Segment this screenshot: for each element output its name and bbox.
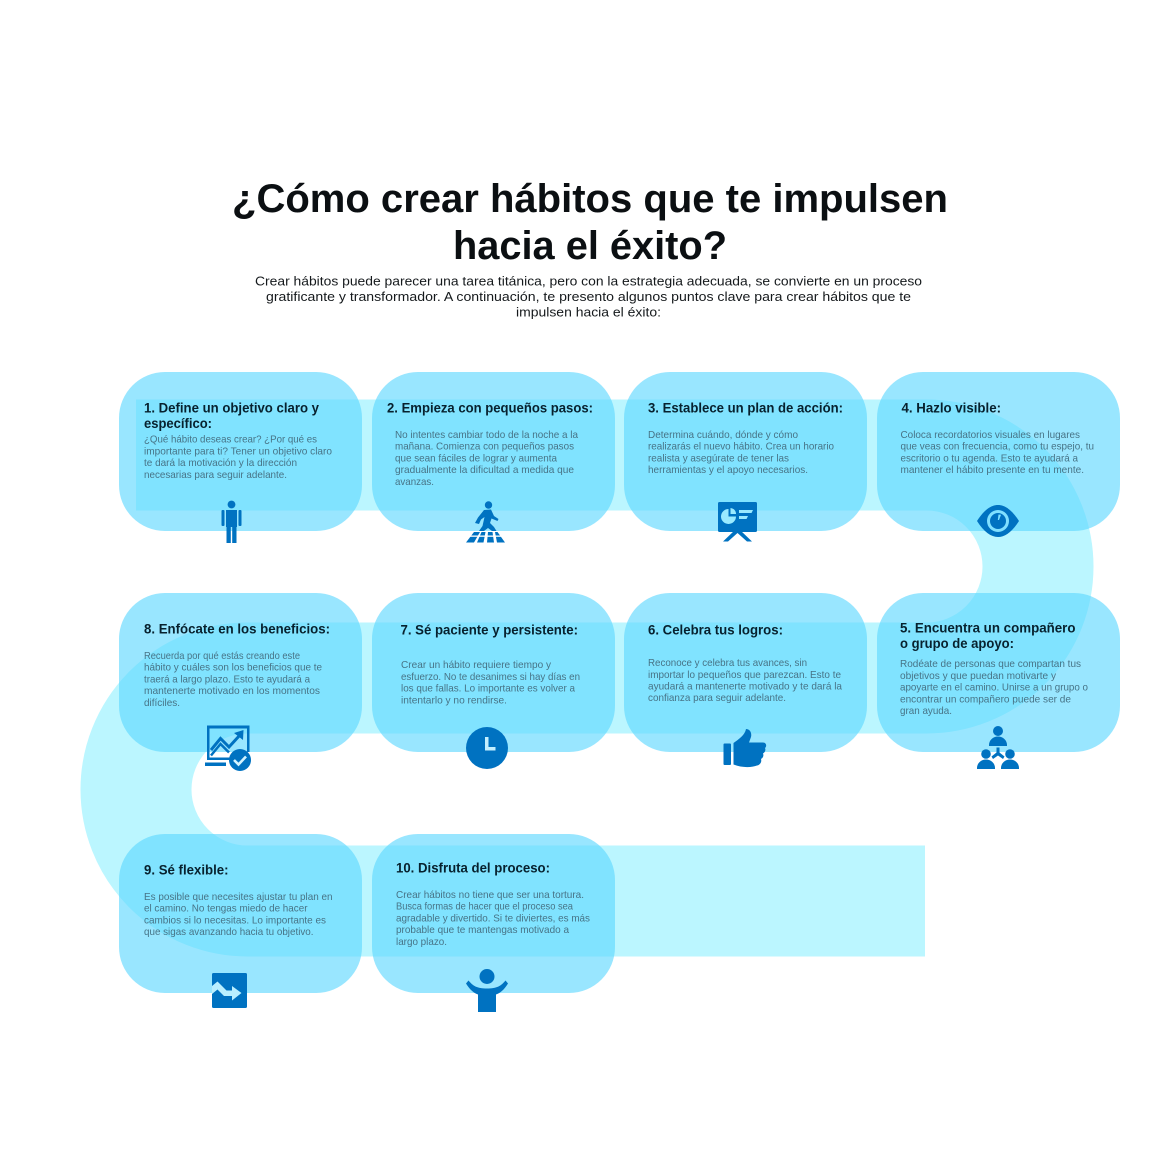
- text: step 6: Reconoce y celebra tus avances, sin: [648, 658, 807, 669]
- text: step 10: [396, 890, 590, 948]
- text: step 7: [401, 660, 580, 706]
- panel: step 7: [372, 593, 615, 769]
- text: step 7: los que fallas. Lo importante es volver a: [401, 684, 575, 694]
- panel: step 10: [372, 834, 615, 1012]
- winding ribbon path: [136, 455, 1038, 901]
- intro text: Crear hábitos puede parecer una tarea titánica, pero con la estrategia adecuada, se convierte en un proceso: [255, 274, 922, 288]
- panel: step 1: [119, 372, 362, 543]
- text: step 1: ¿Qué hábito deseas crear? ¿Por qué es: [144, 434, 317, 446]
- text: step 9: que sigas avanzando hacia tu objetivo.: [144, 927, 314, 938]
- text: step 10: largo plazo.: [396, 937, 447, 948]
- text: step 9: [144, 892, 332, 938]
- text: step 1: necesarias para seguir adelante.: [144, 470, 287, 481]
- text: step 8: mantenerte motivado en los momentos: [144, 686, 320, 697]
- icon: person with raised arms: [466, 969, 508, 1012]
- heading: step 5: [900, 620, 1076, 651]
- text: step 7: esfuerzo. No te desanimes si hay días en: [401, 672, 580, 683]
- text: step 8: Recuerda por qué estás creando este: [144, 651, 300, 662]
- icon: growth chart with check: [205, 726, 251, 771]
- heading: step 9: 9. Sé flexible:: [144, 862, 228, 878]
- title: [232, 177, 948, 268]
- text: step 2: avanzas.: [395, 477, 434, 488]
- text: step 2: [395, 430, 578, 488]
- intro text: gratificante y transformador. A continuación, te presento algunos puntos clave para crear hábitos que te: [266, 289, 911, 304]
- text: step 3: realista y asegúrate de tener las: [648, 454, 789, 464]
- text: step 8: difíciles.: [144, 698, 180, 709]
- text: step 3: Determina cuándo, dónde y cómo: [648, 430, 798, 441]
- heading: step 3: 3. Establece un plan de acción:: [648, 400, 843, 416]
- text: step 4: escritorio o tu agenda. Esto te ayudará a: [900, 454, 1078, 464]
- title: hacia el éxito?: [453, 224, 727, 268]
- title: ¿Cómo crear hábitos que te impulsen: [232, 177, 948, 221]
- text: step 1: te dará la motivación y la dirección: [144, 458, 297, 469]
- text: step 1: [144, 434, 332, 481]
- text: step 4: Coloca recordatorios visuales en lugares: [900, 430, 1080, 441]
- panel: step 5: [877, 593, 1120, 769]
- icon: presentation board: [718, 502, 757, 542]
- text: step 10: probable que te mantengas motivado a: [396, 925, 569, 936]
- heading: step 7: 7. Sé paciente y persistente:: [400, 622, 578, 638]
- text: step 4: mantener el hábito presente en tu mente.: [900, 465, 1084, 476]
- icon: pedestrian crossing: [466, 501, 505, 542]
- text: step 2: mañana. Comienza con pequeños pasos: [395, 442, 574, 452]
- heading: step 10: 10. Disfruta del proceso:: [396, 860, 550, 876]
- icon: clock: [466, 727, 508, 769]
- text: step 10: Busca formas de hacer que el proceso sea: [396, 902, 573, 912]
- text: step 6: confianza para seguir adelante.: [648, 693, 786, 704]
- heading: step 1: 1. Define un objetivo claro y: [144, 400, 319, 416]
- text: step 5: gran ayuda.: [900, 706, 952, 717]
- icon: support group: [977, 726, 1019, 769]
- text: step 3: realizarás el nuevo hábito. Crea un horario: [648, 442, 834, 452]
- heading: step 2: 2. Empieza con pequeños pasos:: [387, 400, 593, 416]
- text: step 8: hábito y cuáles son los beneficios que te: [144, 662, 322, 674]
- text: step 8: traerá a largo plazo. Esto te ayudará a: [144, 674, 310, 686]
- heading: step 5: 5. Encuentra un compañero: [900, 620, 1076, 636]
- icon: flexible route arrow: [212, 973, 247, 1008]
- text: step 5: [900, 659, 1088, 717]
- text: step 3: herramientas y el apoyo necesarios.: [648, 465, 808, 476]
- icon: thumbs up: [724, 729, 766, 767]
- heading: step 1: [144, 400, 319, 431]
- panel: step 9: [119, 834, 362, 1008]
- heading: step 6: 6. Celebra tus logros:: [648, 622, 783, 638]
- intro text: [255, 274, 922, 320]
- text: step 10: agradable y divertido. Si te diviertes, es más: [396, 914, 590, 924]
- text: step 9: el camino. No tengas miedo de hacer: [144, 904, 308, 914]
- text: step 1: importante para ti? Tener un objetivo claro: [144, 446, 332, 458]
- text: step 6: ayudará a mantenerte motivado y te dará la: [648, 682, 842, 692]
- panel: step 3: [624, 372, 867, 542]
- heading: step 1: específico:: [144, 416, 212, 431]
- text: step 2: gradualmente la dificultad a medida que: [395, 465, 574, 476]
- text: step 9: cambios si lo necesitas. Lo importante es: [144, 916, 326, 926]
- text: step 2: que sean fáciles de lograr y aumenta: [395, 454, 557, 464]
- heading: step 5: o grupo de apoyo:: [900, 636, 1014, 651]
- text: step 3: [648, 430, 834, 476]
- heading: step 8: 8. Enfócate en los beneficios:: [144, 622, 330, 636]
- panel: step 6: [624, 593, 867, 767]
- text: step 6: [648, 658, 842, 704]
- panel: step 8: [119, 593, 362, 771]
- text: step 7: intentarlo y no rendirse.: [401, 696, 507, 706]
- panel: step 2: [372, 372, 615, 542]
- panel: step 4: [877, 372, 1120, 537]
- text: step 7: Crear un hábito requiere tiempo y: [401, 660, 552, 671]
- text: step 5: apoyarte en el camino. Unirse a un grupo o: [900, 682, 1088, 694]
- icon: eye: [977, 505, 1019, 537]
- heading: step 4: 4. Hazlo visible:: [902, 400, 1001, 416]
- text: step 4: [900, 430, 1094, 476]
- text: step 5: encontrar un compañero puede ser de: [900, 694, 1071, 706]
- text: step 9: Es posible que necesites ajustar tu plan en: [144, 892, 332, 903]
- text: step 6: importar lo pequeños que parezcan. Esto te: [648, 670, 841, 681]
- text: step 10: Crear hábitos no tiene que ser una tortura.: [396, 890, 584, 901]
- text: step 5: Rodéate de personas que compartan tus: [900, 659, 1081, 670]
- icon: standing person: [222, 501, 242, 543]
- intro text: impulsen hacia el éxito:: [516, 304, 661, 320]
- text: step 5: objetivos y que puedan motivarte y: [900, 671, 1057, 682]
- text: step 4: que veas con frecuencia, como tu espejo, tu: [900, 442, 1094, 452]
- text: step 8: [144, 651, 322, 709]
- text: step 2: No intentes cambiar todo de la noche a la: [395, 430, 578, 441]
